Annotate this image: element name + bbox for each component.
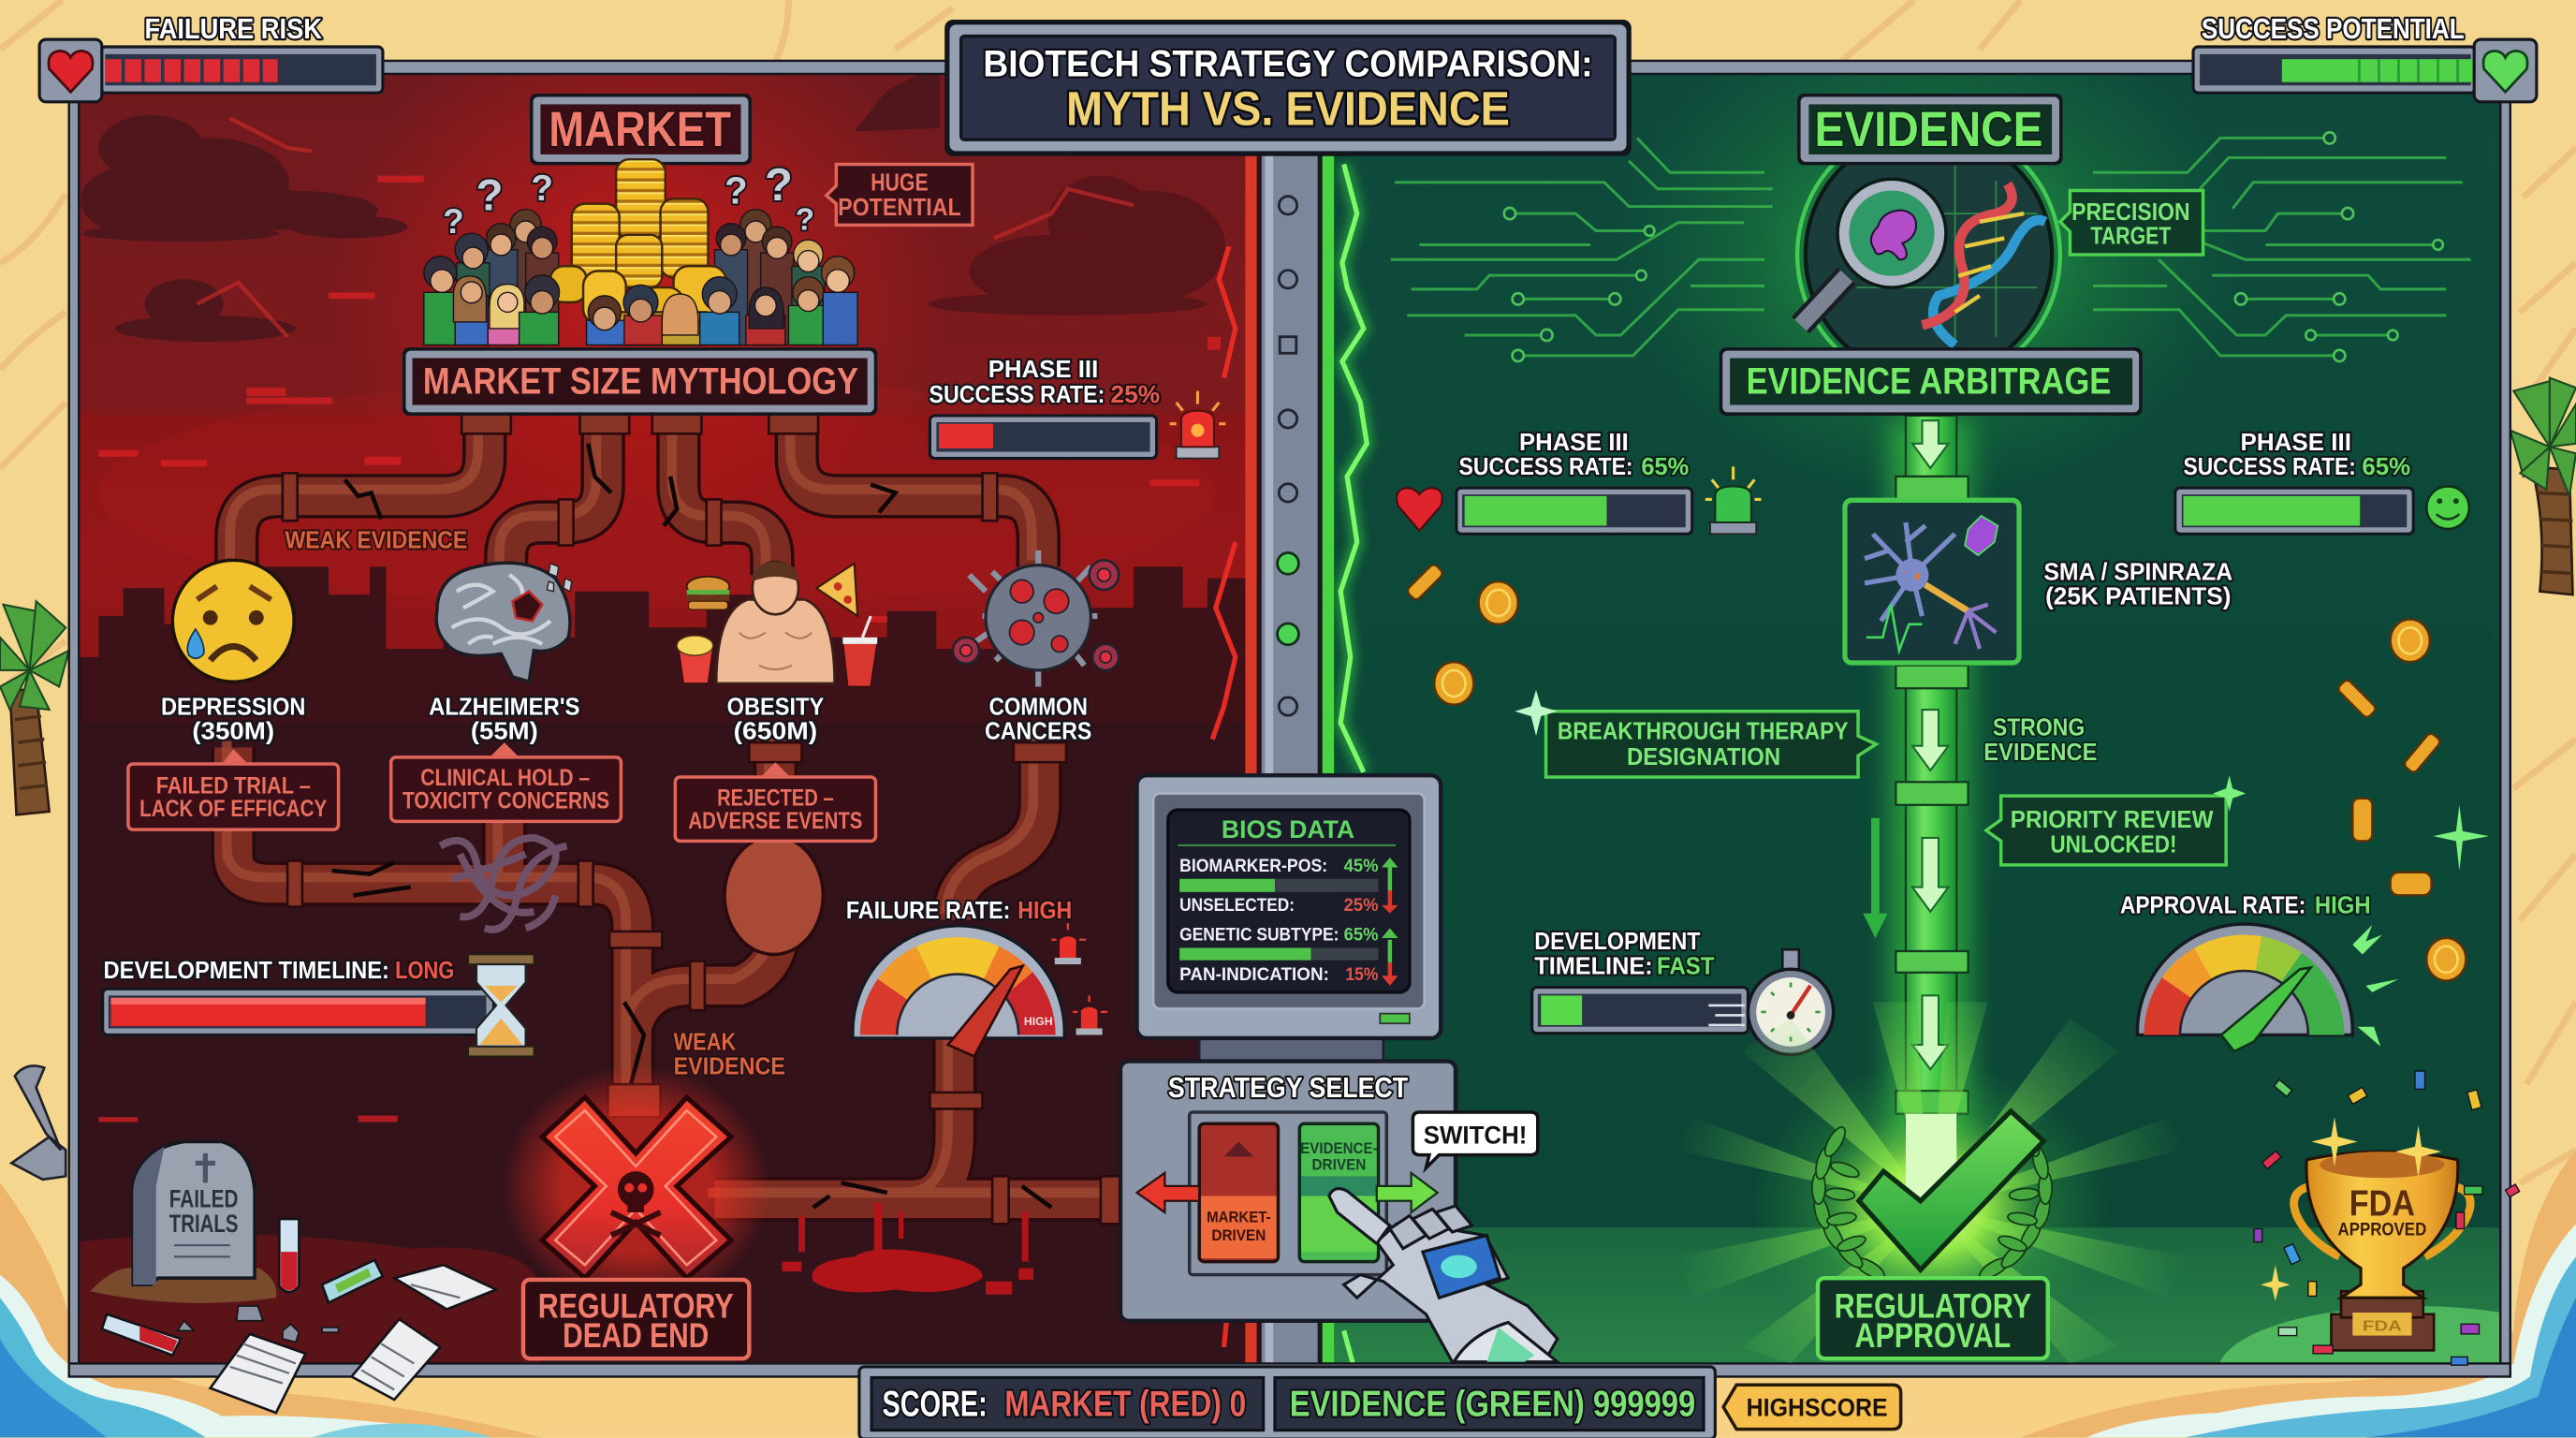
icon: fda trophy: FDA [2363,1318,2402,1334]
icon: gold coins [1406,563,2466,981]
icon: fda trophy [2294,1152,2470,1350]
health bar: success potential [2193,12,2537,102]
label: obesity: OBESITY [727,694,824,720]
icon: gravestone failed trials: FAILED [169,1184,238,1213]
stat: phase iii 65% left [1397,430,1761,534]
label: regulatory dead end: DEAD END [563,1316,709,1355]
market size mythology heading [402,347,877,416]
callout: precision target: PRECISION [2071,199,2190,226]
icon: small siren [1073,995,1107,1034]
tag: rejected: REJECTED – [717,786,834,812]
sparkles [2213,775,2489,1047]
tag: rejected [675,762,875,841]
coin stacks [550,159,726,345]
tag: priority review: UNLOCKED! [2050,832,2177,858]
monitor: bios data: GENETIC SUBTYPE: [1179,925,1339,945]
monitor: bios data: BIOMARKER-POS: [1179,857,1327,876]
label: alzheimers [429,694,580,745]
health bar: failure risk: FAILURE RISK [144,12,322,45]
stat: phase iii 25%: 25% [1110,382,1160,408]
pipe arrows [1912,420,1949,1069]
tag: failed trial [128,749,339,829]
icon: magnifier dna circle [1797,124,2060,386]
label: weak evidence (lower): WEAK [674,1027,736,1055]
palm tree left [0,601,69,814]
stat: development timeline long: LONG [395,956,454,984]
monitor: bios data: 45% [1344,857,1379,876]
label: depression: DEPRESSION [161,694,305,720]
pipes: red side network [227,407,1120,1295]
health bar: failure risk [39,12,383,102]
water: bottom-right sea [2086,1224,2576,1437]
tag: highscore: HIGHSCORE [1747,1393,1888,1422]
icon: small siren [1051,923,1086,964]
icon: red siren [1170,391,1225,459]
clouds [80,74,940,342]
label: weak evidence (lower): EVIDENCE [674,1052,785,1080]
tag: breakthrough therapy: BREAKTHROUGH THERAPY [1558,719,1849,745]
question marks: ? [476,171,503,221]
stat: approval rate gauge [2120,891,2371,1051]
market heading [530,94,752,165]
stat: approval rate gauge: HIGH [2315,891,2371,919]
monitor: bios data: 25% [1344,896,1379,916]
monitor: bios data: PAN-INDICATION: [1179,965,1329,985]
confetti [2254,1071,2520,1365]
green evidence button: DRIVEN [1311,1155,1366,1173]
stat: failure rate gauge [846,896,1107,1056]
monitor: bios data: UNSELECTED: [1179,896,1295,916]
red market button [1199,1123,1278,1262]
monitor: bios data: BIOS DATA [1222,814,1354,844]
stat: failure rate gauge: HIGH [1024,1015,1053,1028]
palm tree right [2510,378,2576,594]
pipe collars [283,414,1120,1224]
label: regulatory dead end [523,1280,749,1358]
stat: phase iii 25%: SUCCESS RATE: [929,382,1105,408]
label: obesity [727,694,824,745]
title [944,20,1632,156]
stat: phase iii 65% right [2175,430,2469,534]
icon: virus common cancers [953,550,1119,686]
stat: phase iii 65% left: SUCCESS RATE: [1459,454,1633,480]
label: alzheimers: (55M) [471,719,538,745]
green pipe [1863,416,1971,1188]
icon: gravestone failed trials: TRIALS [169,1209,238,1238]
back row people [455,210,825,345]
icon: heart [1397,488,1442,531]
label: regulatory dead end: REGULATORY [538,1286,734,1325]
pipe bulge: obesity [724,836,823,954]
stat: failure rate gauge: FAILURE RATE: [846,896,1010,924]
arrow: right green [1377,1173,1438,1212]
icon: approval check and laurels [1676,1002,2185,1363]
tag: clinical hold: CLINICAL HOLD – [420,766,590,791]
monitor: bios data: 15% [1345,965,1379,985]
tag: highscore [1723,1385,1901,1430]
debris rubble [178,1306,339,1343]
right panel: evidence background [1334,75,2499,1363]
tag: rejected: ADVERSE EVENTS [688,809,862,834]
callout: huge potential: POTENTIAL [838,195,961,221]
evidence arbitrage heading: EVIDENCE ARBITRAGE [1747,361,2111,403]
stat: phase iii 65% left: 65% [1641,454,1689,480]
question marks: ? [724,169,748,213]
water: bottom-left sea [0,1275,493,1437]
stat: approval rate gauge: APPROVAL RATE: [2120,891,2305,919]
label: strong evidence: STRONG [1993,714,2085,741]
label: strong evidence: EVIDENCE [1983,740,2097,766]
laurel left [1811,1124,1887,1283]
front row people [424,257,857,345]
stat: phase iii 65% right: SUCCESS RATE: [2184,454,2356,480]
city skyline [79,566,1258,723]
label: sma spinraza: SMA / SPINRAZA [2043,559,2232,585]
stat: development timeline long [103,954,534,1056]
tag: failed trial: FAILED TRIAL – [156,774,311,800]
question marks: ? [443,202,464,241]
label: depression: (350M) [192,719,274,745]
panel: strategy select [1120,1062,1456,1321]
callout: huge potential: HUGE [871,170,929,197]
stat: development timeline fast: FAST [1657,954,1715,980]
health bar: success potential: SUCCESS POTENTIAL [2202,12,2465,45]
circuit traces [1391,132,2471,361]
icon: test tubes and papers [102,1219,496,1413]
monitor: bios data [1137,775,1441,1064]
stat: phase iii 65% left: PHASE III [1519,430,1629,456]
callout: precision target: TARGET [2090,224,2172,250]
center divider [1245,148,1334,1372]
callout: switch [1412,1112,1538,1168]
title: MYTH VS. EVIDENCE [1066,81,1510,135]
stat: phase iii 25% [929,357,1225,459]
question marks: ? [765,160,793,211]
monitor: bios data: 65% [1344,925,1379,945]
panel: strategy select: STRATEGY SELECT [1168,1071,1408,1104]
side arrow [1863,818,1888,938]
title: BIOTECH STRATEGY COMPARISON: [983,44,1593,85]
stat: failure rate gauge: HIGH [1017,896,1072,924]
icon: obesity figure and junk food [677,562,877,686]
sparkle [1515,690,1558,736]
score bar [859,1367,1715,1438]
icon: stopwatch [1748,949,1834,1055]
gold sparkles [2261,1117,2441,1301]
label: common cancers [985,694,1091,745]
label: regulatory approval: APPROVAL [1855,1316,2011,1355]
market size mythology heading: MARKET SIZE MYTHOLOGY [423,361,858,403]
label: sma spinraza: (25K PATIENTS) [2045,584,2231,610]
score bar: SCORE: [882,1385,988,1425]
label: sma spinraza [2043,559,2232,610]
tag: failed trial: LACK OF EFFICACY [139,797,327,822]
callout: huge potential [827,164,973,225]
label: alzheimers: ALZHEIMER'S [429,694,580,720]
laurel right [1977,1124,2053,1283]
icon: gravestone failed trials [91,1142,276,1303]
icon: fda trophy: FDA [2349,1184,2415,1224]
icon: tangled worms [440,838,567,930]
tag: clinical hold [391,742,621,821]
stat: phase iii 65% right: PHASE III [2241,430,2351,456]
left panel: market background [76,0,1258,1370]
icon: green siren [1705,466,1761,534]
tag: breakthrough therapy: DESIGNATION [1627,744,1780,770]
rusty anchor on beach [11,1065,66,1180]
evidence heading: EVIDENCE [1815,102,2042,157]
green evidence button [1299,1123,1379,1262]
blood puddle [782,1202,1033,1295]
stat: phase iii 65% right: 65% [2362,454,2410,480]
stat: phase iii 25%: PHASE III [988,357,1098,383]
tag: clinical hold: TOXICITY CONCERNS [402,788,609,814]
label: depression [161,694,305,745]
question marks: ? [796,203,814,238]
question marks: ? [531,169,553,209]
green lightning [1340,164,1367,1367]
stat: development timeline fast [1532,929,1834,1055]
callout: precision target [2060,191,2203,255]
crowd and gold coins [424,159,857,345]
label: common cancers: COMMON [989,694,1088,720]
question marks [443,160,814,241]
label: weak evidence (lower) [674,1027,785,1080]
label: common cancers: CANCERS [985,719,1091,745]
icon: damaged brain alzheimers [436,563,572,682]
label: regulatory approval [1818,1278,2048,1358]
arrow: left red [1137,1173,1199,1212]
market heading: MARKET [549,102,731,157]
icon: sad face depression [172,560,294,682]
glitch dashes [98,176,1221,1122]
stat: development timeline fast: DEVELOPMENT [1534,929,1701,955]
stat: development timeline long: DEVELOPMENT TIMELINE: [104,956,389,984]
icon: fda trophy: APPROVED [2338,1221,2426,1240]
label: regulatory approval: REGULATORY [1835,1286,2031,1325]
red lightning [1208,246,1236,1347]
neuron tile [1845,500,2019,663]
stat: development timeline fast: TIMELINE: [1534,954,1653,980]
score bar: EVIDENCE (GREEN) 999999 [1290,1385,1695,1425]
tag: breakthrough therapy [1515,690,1876,777]
green evidence button: EVIDENCE- [1300,1139,1378,1157]
label: weak evidence (top): WEAK EVIDENCE [285,526,467,554]
label: obesity: (650M) [734,719,817,745]
red market button: DRIVEN [1211,1226,1266,1244]
pipe cracks [332,444,1051,1208]
red market button: MARKET- [1207,1209,1271,1226]
score bar: MARKET (RED) 0 [1004,1385,1246,1425]
icon: robot hand [1329,1189,1558,1362]
evidence arbitrage heading [1720,347,2143,416]
callout: switch: SWITCH! [1424,1120,1527,1149]
icon: hourglass [468,954,534,1056]
label: strong evidence [1983,714,2097,766]
tag: priority review [1986,796,2226,865]
tag: priority review: PRIORITY REVIEW [2011,807,2214,833]
icon: smile [2426,486,2469,529]
icon: red x skull [501,1064,770,1308]
